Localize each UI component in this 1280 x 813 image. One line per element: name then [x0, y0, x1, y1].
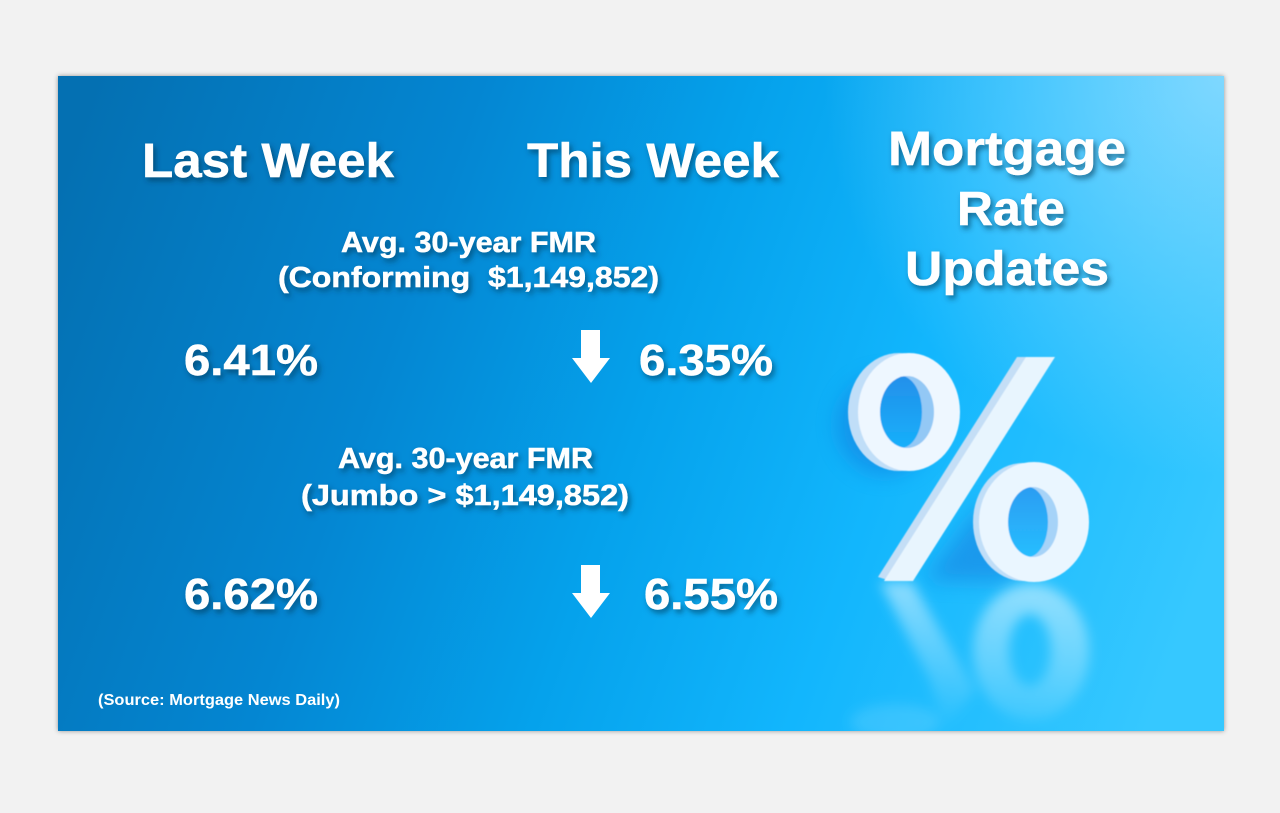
title: Mortgage Rate Updates: Updates — [905, 243, 1109, 296]
heading: Last Week: Last Week — [142, 135, 394, 188]
text block: jumbo label — [301, 443, 629, 512]
cast shadows — [837, 375, 1025, 582]
reflection — [850, 582, 1089, 740]
infographic canvas — [55, 73, 1227, 734]
title: Mortgage Rate Updates — [888, 123, 1126, 296]
icon: down arrow jumbo — [572, 565, 610, 618]
title: Mortgage Rate Updates: Rate — [957, 183, 1065, 236]
this week jumbo rate: 6.55% — [644, 570, 778, 619]
source note: (Source: Mortgage News Daily) — [98, 692, 340, 709]
text block: jumbo label: Avg. 30-year FMR — [338, 443, 593, 475]
slash: side and face — [878, 357, 1055, 581]
icon: 3D percent sign with reflection — [837, 353, 1089, 740]
title: Mortgage Rate Updates: Mortgage — [888, 123, 1126, 176]
last week conforming rate: 6.41% — [184, 336, 318, 385]
last week jumbo rate: 6.62% — [184, 570, 318, 619]
text block: conforming label — [278, 227, 659, 294]
this week conforming rate: 6.35% — [639, 336, 773, 385]
text block: conforming label: (Conforming $1,149,852) — [278, 262, 659, 294]
text block: conforming label: Avg. 30-year FMR — [341, 227, 596, 259]
panel: blue gradient background — [58, 76, 1224, 731]
bottom ring — [973, 462, 1089, 582]
icon: down arrow conforming — [572, 330, 610, 383]
top ring — [848, 353, 960, 471]
heading: This Week: This Week — [527, 135, 779, 188]
text block: jumbo label: (Jumbo > $1,149,852) — [301, 480, 629, 512]
